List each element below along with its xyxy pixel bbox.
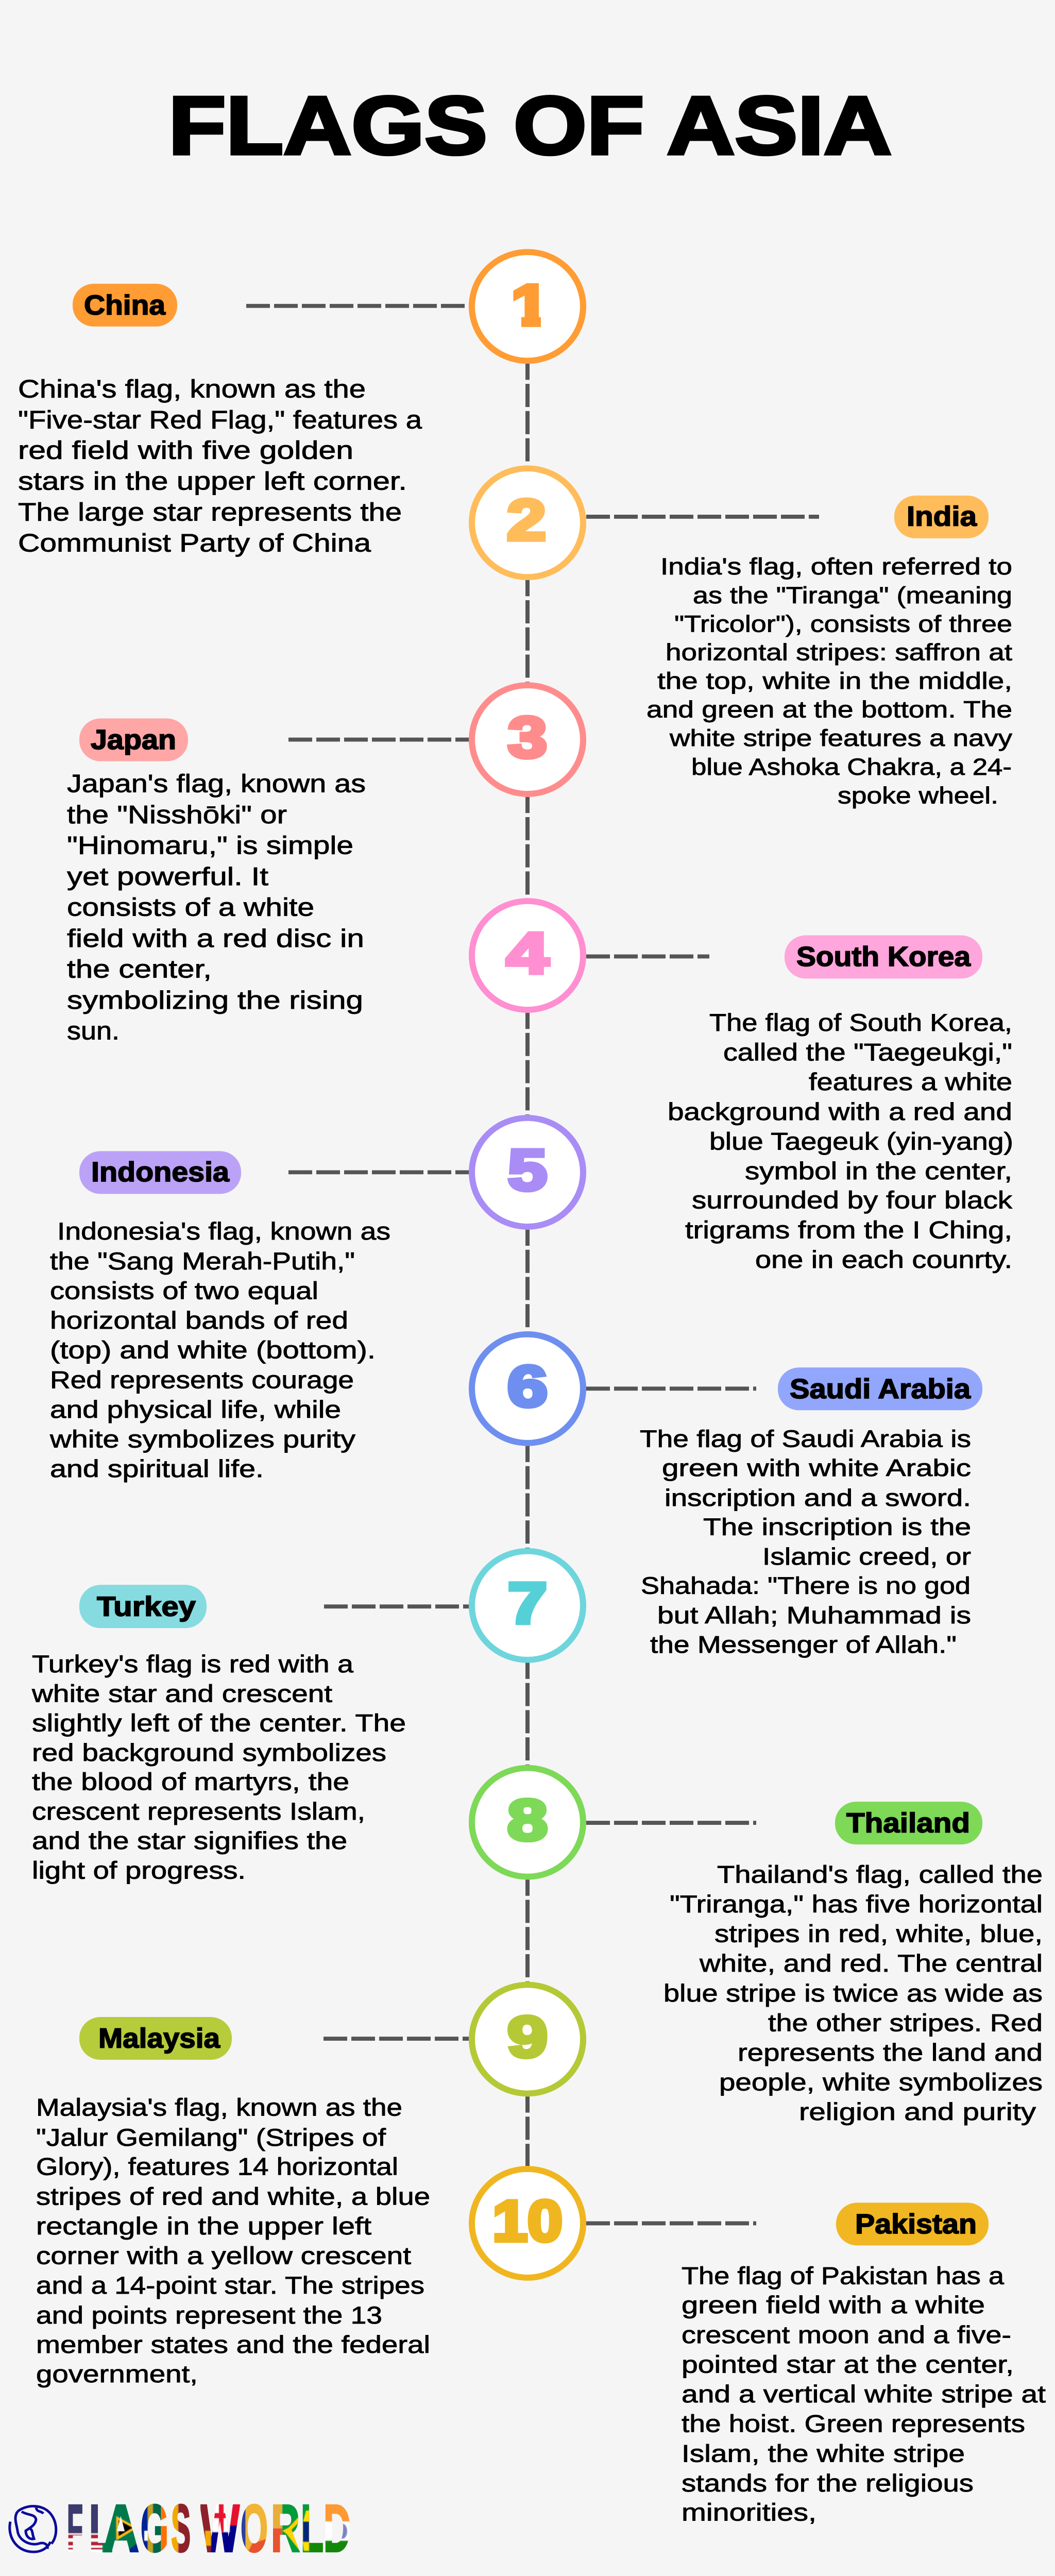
- description: Saudi Arabia: green with white Arabic: [662, 1455, 971, 1481]
- label pill: China: China: [84, 290, 166, 320]
- description: Malaysia: Glory), features 14 horizontal: [36, 2154, 398, 2181]
- description: Indonesia: [49, 1218, 390, 1483]
- panel: 10 Pakistan: [472, 2169, 1046, 2526]
- step circle 5: 5: [508, 1138, 547, 1202]
- description: South Korea: features a white: [809, 1069, 1012, 1096]
- title: FLAGS OF ASIA: [168, 80, 892, 172]
- label pill: Malaysia: Malaysia: [98, 2023, 220, 2054]
- description: Saudi Arabia: Shahada: "There is no god: [641, 1572, 971, 1599]
- wordmark: O: [241, 2491, 268, 2566]
- step circle 1: [472, 252, 583, 361]
- description: Saudi Arabia: Islamic creed, or: [762, 1544, 971, 1570]
- description: Indonesia: horizontal bands of red: [50, 1308, 348, 1334]
- wordmark: R: [271, 2491, 300, 2566]
- label pill: Japan: Japan: [91, 724, 176, 755]
- step circle 10: [472, 2169, 583, 2278]
- panel: 1 China: [18, 252, 583, 557]
- description: Malaysia: member states and the federal: [36, 2331, 430, 2359]
- step circle 4: [472, 901, 583, 1010]
- step circle 2: [472, 468, 583, 577]
- description: Indonesia: and physical life, while: [50, 1396, 341, 1423]
- description: Thailand: Thailand's flag, called the: [717, 1861, 1043, 1888]
- description: South Korea: trigrams from the I Ching,: [685, 1217, 1012, 1244]
- description: Saudi Arabia: but Allah; Muhammad is: [657, 1602, 971, 1629]
- description: Malaysia: corner with a yellow crescent: [36, 2243, 411, 2269]
- label pill: Pakistan: Pakistan: [855, 2209, 977, 2240]
- description: Thailand: represents the land and: [738, 2040, 1043, 2066]
- label pill: Thailand: Thailand: [846, 1807, 970, 1838]
- wordmark: W: [200, 2491, 240, 2566]
- description: South Korea: surrounded by four black: [692, 1187, 1012, 1214]
- description: India: India's flag, often referred to: [660, 553, 1012, 580]
- step circle 8: 8: [507, 1788, 548, 1853]
- description: Malaysia: [36, 2094, 430, 2388]
- label pill: Indonesia: [79, 1151, 241, 1194]
- description: Thailand: religion and purity: [799, 2099, 1036, 2126]
- icon: globe: [10, 2506, 56, 2552]
- description: Japan: the center,: [67, 955, 212, 983]
- description: India: blue Ashoka Chakra, a 24-: [691, 753, 1012, 780]
- description: Turkey: light of progress.: [32, 1857, 246, 1884]
- description: Japan: [67, 770, 366, 1045]
- description: Turkey: slightly left of the center. The: [32, 1710, 406, 1737]
- label pill: Pakistan: [836, 2202, 989, 2245]
- description: India: the top, white in the middle,: [657, 667, 1012, 694]
- description: India: as the "Tiranga" (meaning: [693, 582, 1012, 608]
- description: Pakistan: minorities,: [682, 2499, 816, 2526]
- description: Saudi Arabia: the Messenger of Allah.": [650, 1632, 957, 1658]
- wordmark: L: [301, 2491, 324, 2566]
- description: Japan: sun.: [67, 1017, 120, 1045]
- step circle 2: 2: [507, 488, 546, 553]
- description: Malaysia: and points represent the 13: [36, 2302, 382, 2329]
- description: Japan: field with a red disc in: [67, 924, 364, 953]
- description: India: white stripe features a navy: [669, 725, 1012, 751]
- description: China: China's flag, known as the: [18, 375, 366, 403]
- description: Indonesia: Indonesia's flag, known as: [57, 1218, 390, 1245]
- description: Indonesia: consists of two equal: [50, 1278, 318, 1304]
- description: China: red field with five golden: [18, 436, 353, 464]
- description: South Korea: symbol in the center,: [745, 1158, 1012, 1185]
- description: Japan: yet powerful. It: [67, 862, 268, 891]
- wordmark: D: [324, 2491, 351, 2566]
- description: Pakistan: pointed star at the center,: [682, 2351, 1014, 2378]
- panel: 3 Japan: [67, 685, 583, 1045]
- step circle 4: 4: [506, 921, 549, 986]
- logo: Flags World: [10, 2491, 351, 2566]
- description: India: horizontal stripes: saffron at: [666, 639, 1012, 666]
- step circle 7: 7: [508, 1571, 547, 1636]
- description: China: "Five-star Red Flag," features a: [18, 406, 422, 434]
- step circle 3: 3: [508, 705, 547, 770]
- panel: 8 Thailand: [472, 1768, 1043, 2126]
- description: China: [18, 375, 422, 557]
- panel: 2 India: [472, 468, 1012, 808]
- description: Indonesia: the "Sang Merah-Putih,": [50, 1248, 355, 1275]
- description: Thailand: blue stripe is twice as wide as: [663, 1980, 1043, 2007]
- description: South Korea: [668, 1009, 1013, 1274]
- description: Pakistan: the hoist. Green represents: [682, 2411, 1025, 2438]
- step circle 6: 6: [507, 1354, 548, 1419]
- description: Japan: consists of a white: [67, 893, 314, 921]
- label pill: China: [73, 284, 177, 327]
- label pill: Turkey: [79, 1585, 207, 1628]
- description: Thailand: people, white symbolizes: [719, 2069, 1043, 2096]
- description: Thailand: the other stripes. Red: [768, 2010, 1043, 2037]
- description: Japan: "Hinomaru," is simple: [67, 832, 353, 860]
- description: Saudi Arabia: inscription and a sword.: [665, 1484, 971, 1511]
- step circle 8: [472, 1768, 583, 1877]
- step circle 9: [472, 1985, 583, 2093]
- description: Thailand: stripes in red, white, blue,: [714, 1921, 1043, 1947]
- wordmark: G: [141, 2491, 168, 2566]
- description: India: [646, 553, 1012, 808]
- step circle 6: [472, 1334, 583, 1443]
- description: Turkey: white star and crescent: [31, 1681, 332, 1708]
- panel: 4 South Korea: [472, 901, 1013, 1274]
- step circle 7: [472, 1551, 583, 1660]
- label pill: Turkey: Turkey: [97, 1591, 196, 1622]
- description: Thailand: [663, 1861, 1043, 2126]
- wordmark: L: [89, 2491, 113, 2566]
- description: Malaysia: rectangle in the upper left: [36, 2213, 371, 2240]
- step circle 5: [472, 1118, 583, 1227]
- description: South Korea: background with a red and: [668, 1098, 1012, 1126]
- description: India: spoke wheel.: [838, 782, 998, 808]
- label pill: Malaysia: [79, 2017, 232, 2060]
- description: Japan: the "Nisshōki" or: [67, 801, 287, 829]
- panel: 9 Malaysia: [36, 1985, 583, 2388]
- description: Pakistan: crescent moon and a five-: [682, 2321, 1011, 2349]
- description: South Korea: blue Taegeuk (yin-yang): [709, 1128, 1013, 1155]
- description: Thailand: white, and red. The central: [699, 1951, 1043, 1977]
- description: Malaysia: stripes of red and white, a blue: [36, 2183, 430, 2210]
- wordmark: A: [103, 2491, 139, 2566]
- panel: 7 Turkey: [31, 1551, 583, 1884]
- description: India: and green at the bottom. The: [646, 696, 1012, 722]
- description: South Korea: one in each counrty.: [755, 1246, 1012, 1274]
- description: Pakistan: green field with a white: [682, 2292, 985, 2319]
- label pill: India: India: [907, 501, 977, 532]
- step circle 9: 9: [507, 2005, 548, 2070]
- description: Thailand: "Triranga," has five horizontal: [670, 1891, 1043, 1918]
- description: China: stars in the upper left corner.: [18, 467, 407, 496]
- step circle 3: [472, 685, 583, 794]
- label pill: South Korea: South Korea: [796, 941, 971, 972]
- description: Pakistan: [682, 2263, 1046, 2526]
- description: Malaysia: Malaysia's flag, known as the: [36, 2094, 402, 2121]
- description: Pakistan: Islam, the white stripe: [682, 2441, 965, 2467]
- description: Saudi Arabia: [640, 1426, 971, 1658]
- description: India: "Tricolor"), consists of three: [674, 611, 1012, 637]
- description: Malaysia: government,: [36, 2361, 198, 2388]
- panel: 6 Saudi Arabia: [472, 1334, 982, 1658]
- wordmark: F: [67, 2491, 83, 2566]
- description: South Korea: The flag of South Korea,: [709, 1009, 1012, 1037]
- step circle 1: 1: [511, 273, 549, 338]
- wordmark: [67, 2491, 351, 2566]
- label pill: Saudi Arabia: [778, 1367, 982, 1410]
- description: China: The large star represents the: [18, 498, 402, 527]
- description: Turkey: Turkey's flag is red with a: [32, 1651, 354, 1678]
- description: Indonesia: and spiritual life.: [50, 1456, 264, 1483]
- label pill: India: [894, 496, 989, 538]
- timeline connectors: [246, 306, 819, 2223]
- description: China: Communist Party of China: [18, 529, 371, 557]
- description: South Korea: called the "Taegeukgi,": [723, 1039, 1012, 1066]
- description: Turkey: red background symbolizes: [32, 1739, 386, 1767]
- description: Pakistan: The flag of Pakistan has a: [682, 2263, 1005, 2290]
- step circle 10: 10: [492, 2189, 563, 2253]
- label pill: Japan: [79, 719, 188, 761]
- description: Turkey: the blood of martyrs, the: [32, 1769, 349, 1795]
- label pill: South Korea: [785, 935, 982, 978]
- description: Malaysia: and a 14-point star. The stripes: [36, 2273, 424, 2299]
- description: Saudi Arabia: The inscription is the: [703, 1514, 971, 1540]
- wordmark: S: [171, 2491, 191, 2566]
- description: Saudi Arabia: The flag of Saudi Arabia is: [640, 1426, 971, 1452]
- description: Japan: symbolizing the rising: [67, 987, 363, 1014]
- description: Malaysia: "Jalur Gemilang" (Stripes of: [36, 2125, 386, 2151]
- description: Turkey: crescent represents Islam,: [32, 1799, 365, 1825]
- description: Japan: Japan's flag, known as: [67, 770, 366, 798]
- panel: 5 Indonesia: [49, 1118, 583, 1483]
- description: Indonesia: white symbolizes purity: [49, 1426, 355, 1453]
- label pill: Saudi Arabia: Saudi Arabia: [790, 1373, 971, 1404]
- description: Indonesia: Red represents courage: [50, 1367, 354, 1394]
- description: Indonesia: (top) and white (bottom).: [50, 1337, 376, 1364]
- description: Pakistan: stands for the religious: [682, 2470, 974, 2497]
- description: Turkey: [31, 1651, 406, 1884]
- description: Turkey: and the star signifies the: [32, 1827, 347, 1855]
- label pill: Indonesia: Indonesia: [91, 1157, 230, 1188]
- label pill: Thailand: [835, 1802, 982, 1844]
- description: Pakistan: and a vertical white stripe at: [682, 2381, 1046, 2408]
